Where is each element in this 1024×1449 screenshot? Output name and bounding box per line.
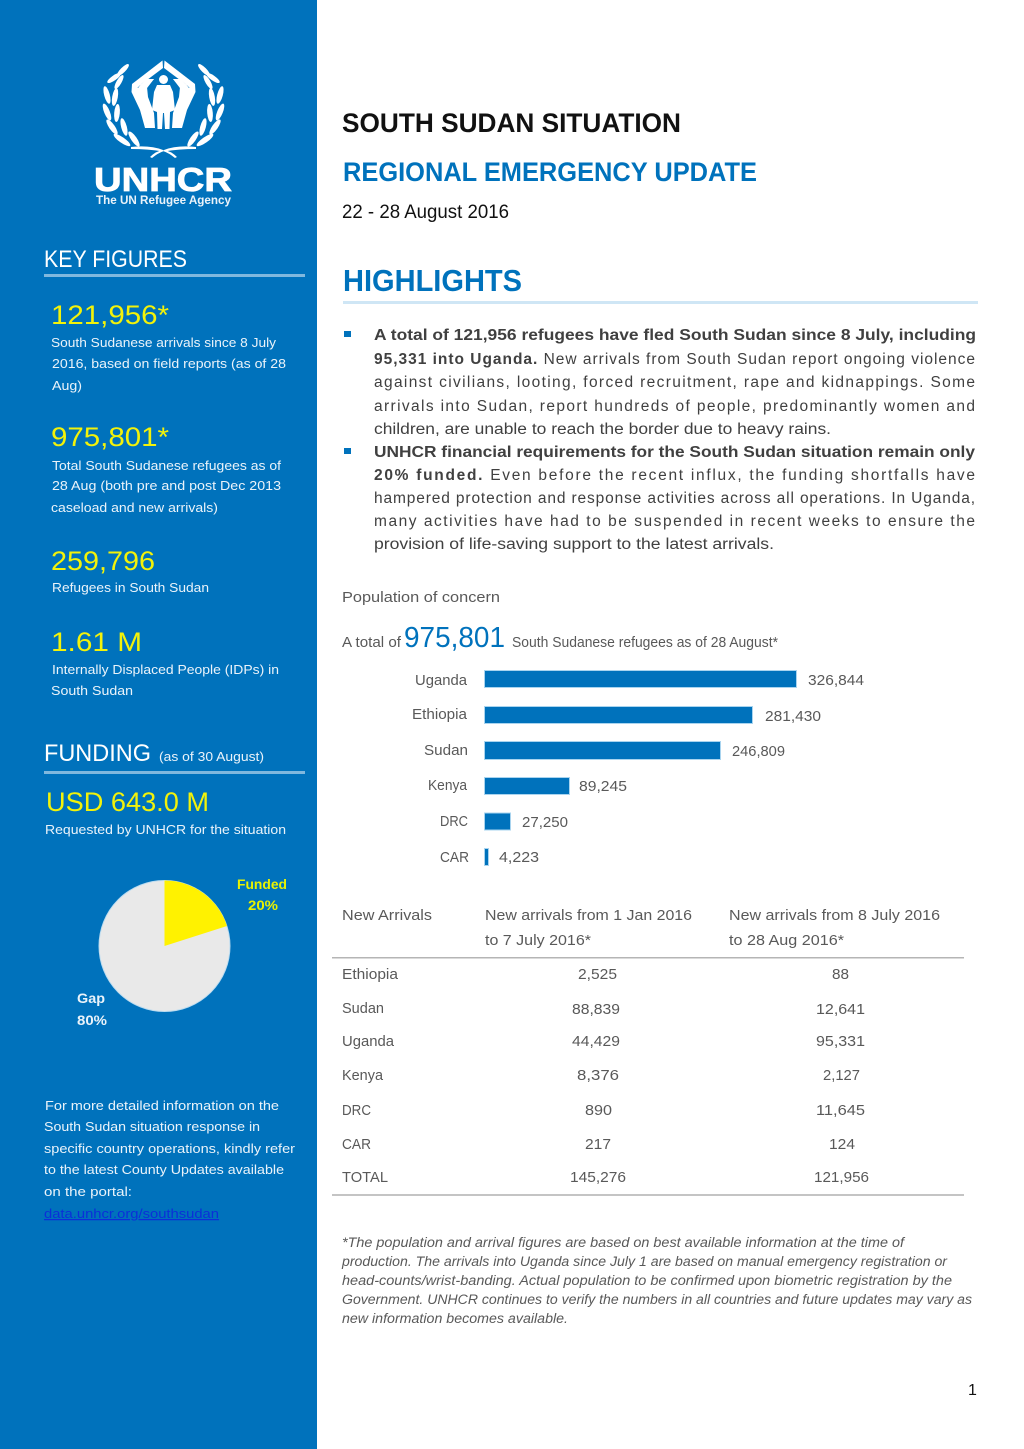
table: new arrivals: 124 bbox=[829, 1137, 855, 1153]
heading: funding: FUNDING bbox=[44, 740, 151, 767]
bar chart: refugees by country: Ethiopia bbox=[412, 707, 468, 723]
text block: highlights bullets: 95,331 into Uganda. New arrivals from South Sudan report ongoing violence bbox=[374, 351, 975, 368]
pie chart: funding: 20% bbox=[248, 898, 278, 913]
table: new arrivals: DRC bbox=[342, 1103, 371, 1119]
pie chart: funding: 80% bbox=[77, 1013, 107, 1028]
table: new arrivals: New Arrivals bbox=[342, 908, 432, 924]
pie chart: funding bbox=[77, 877, 287, 1028]
text block: footnote: *The population and arrival figures are based on best available information at the time of bbox=[342, 1235, 905, 1250]
text block: requested amount: Requested by UNHCR for the situation bbox=[45, 823, 286, 837]
table: new arrivals: Ethiopia bbox=[342, 967, 399, 983]
panel: blue sidebar bbox=[0, 0, 317, 1449]
text block: footnote: new information becomes available. bbox=[342, 1311, 568, 1326]
table: new arrivals: 88 bbox=[832, 967, 849, 983]
table: new arrivals: 217 bbox=[585, 1137, 611, 1153]
text block: 259,796 bbox=[51, 546, 209, 595]
table: new arrivals: 8,376 bbox=[577, 1068, 619, 1084]
text block: highlights bullets: A total of 121,956 refugees have fled South Sudan since 8 July, including bbox=[374, 327, 976, 344]
title: SOUTH SUDAN SITUATION bbox=[342, 108, 681, 138]
table: new arrivals: New arrivals from 8 July 2016 bbox=[729, 908, 940, 924]
text block: footnote: Government. UNHCR continues to verify the numbers in all countries and future updates may vary as bbox=[342, 1292, 972, 1307]
text block: 1.61 M bbox=[51, 627, 279, 698]
text block: highlights bullets: children, are unable to reach the border due to heavy rains. bbox=[374, 421, 831, 438]
text block: 1.61 M: 1.61 M bbox=[51, 627, 142, 657]
text block: 975,801 refugees: 975,801* bbox=[51, 422, 170, 452]
text block: more information: to the latest County Updates available bbox=[44, 1163, 284, 1177]
text block: more information: on the portal: bbox=[44, 1185, 132, 1199]
text block: more information: data.unhcr.org/southsudan bbox=[44, 1207, 219, 1221]
table: new arrivals bbox=[332, 908, 964, 1196]
table: new arrivals: 11,645 bbox=[816, 1103, 865, 1119]
table: new arrivals: 95,331 bbox=[816, 1034, 865, 1050]
pie chart: funding: Gap bbox=[77, 991, 105, 1006]
table: new arrivals: Sudan bbox=[342, 1001, 384, 1017]
text block: 975,801 refugees: Total South Sudanese refugees as of bbox=[52, 459, 282, 473]
bar chart: refugees by country: Sudan bbox=[424, 743, 468, 759]
text block: more information: specific country operations, kindly refer bbox=[44, 1142, 295, 1156]
subtitle: REGIONAL EMERGENCY UPDATE bbox=[343, 157, 757, 187]
heading: funding bbox=[44, 740, 305, 774]
text block: requested amount bbox=[45, 787, 286, 837]
text block: highlights bullets: provision of life-saving support to the latest arrivals. bbox=[374, 536, 774, 553]
bar chart: refugees by country: 89,245 bbox=[579, 779, 627, 795]
text block: footnote: head-counts/wrist-banding. Actual population to be confirmed upon biometric registration by the bbox=[342, 1273, 952, 1288]
text block: 975,801 refugees bbox=[51, 422, 282, 515]
text block: 121,956 arrivals: 2016, based on field reports (as of 28 bbox=[52, 357, 286, 371]
bar chart: refugees by country: Uganda bbox=[415, 673, 468, 689]
text block: 121,956 arrivals: Aug) bbox=[52, 379, 82, 393]
text block: 259,796: Refugees in South Sudan bbox=[52, 581, 209, 595]
text block: more information bbox=[44, 1099, 295, 1221]
icon: refugee figure bbox=[152, 75, 175, 129]
table: new arrivals: 890 bbox=[585, 1103, 612, 1119]
text block: footnote bbox=[341, 1235, 972, 1326]
text block: 1.61 M: Internally Displaced People (IDPs) in bbox=[52, 663, 279, 677]
heading: funding: (as of 30 August) bbox=[159, 749, 264, 764]
text block: highlights bullets: against civilians, looting, forced recruitment, rape and kidnappings. Some bbox=[374, 374, 975, 391]
text block: total refugees: 975,801 bbox=[404, 622, 505, 654]
text block: more information: South Sudan situation response in bbox=[44, 1120, 260, 1134]
table: new arrivals: 145,276 bbox=[570, 1170, 626, 1186]
text block: footnote: production. The arrivals into Uganda since July 1 are based on manual emergency registration or bbox=[341, 1254, 948, 1269]
text block: 1.61 M: South Sudan bbox=[51, 684, 133, 698]
text block: total refugees: South Sudanese refugees as of 28 August* bbox=[512, 635, 778, 651]
text block: 121,956 arrivals: South Sudanese arrivals since 8 July bbox=[51, 336, 277, 350]
bar chart: refugees by country: 326,844 bbox=[808, 673, 864, 689]
table: new arrivals: New arrivals from 1 Jan 2016 bbox=[485, 908, 692, 924]
table: new arrivals: to 28 Aug 2016* bbox=[729, 933, 844, 949]
table: new arrivals: CAR bbox=[342, 1137, 371, 1153]
text block: total refugees: A total of bbox=[342, 635, 402, 651]
text block: 975,801 refugees: 28 Aug (both pre and post Dec 2013 bbox=[52, 479, 281, 493]
bar chart: refugees by country bbox=[412, 670, 864, 866]
text block: 121,956 arrivals bbox=[51, 300, 286, 393]
icon: UNHCR logo: UNHCR bbox=[94, 161, 232, 198]
table: new arrivals: 88,839 bbox=[572, 1002, 620, 1018]
heading: highlights bbox=[343, 263, 978, 304]
table: new arrivals: Uganda bbox=[342, 1034, 395, 1050]
bar chart: refugees by country: 27,250 bbox=[522, 815, 568, 831]
bar chart: refugees by country: 4,223 bbox=[499, 850, 539, 866]
table: new arrivals: 12,641 bbox=[816, 1002, 865, 1018]
text block: 975,801 refugees: caseload and new arrivals) bbox=[51, 501, 218, 515]
text block: highlights bullets: 20% funded. Even before the recent influx, the funding shortfalls have bbox=[374, 467, 975, 484]
bar chart: refugees by country: DRC bbox=[440, 814, 468, 830]
icon: UNHCR logo bbox=[94, 60, 232, 207]
date: 22 - 28 August 2016 bbox=[342, 202, 509, 223]
text block: highlights bullets: UNHCR financial requirements for the South Sudan situation remain only bbox=[374, 444, 975, 461]
table: new arrivals: 2,127 bbox=[823, 1068, 860, 1084]
page number: 1 bbox=[968, 1382, 977, 1399]
text block: highlights bullets: many activities have had to be suspended in recent weeks to ensure the bbox=[374, 513, 975, 530]
text block: highlights bullets bbox=[344, 327, 976, 553]
text block: requested amount: USD 643.0 M bbox=[46, 787, 209, 817]
table: new arrivals: TOTAL bbox=[342, 1170, 388, 1186]
table: new arrivals: 44,429 bbox=[572, 1034, 620, 1050]
heading: population of concern: Population of concern bbox=[342, 590, 500, 606]
bar chart: refugees by country: Kenya bbox=[428, 778, 468, 794]
table: new arrivals: to 7 July 2016* bbox=[485, 933, 591, 949]
bar chart: refugees by country: 246,809 bbox=[732, 744, 785, 760]
text block: highlights bullets: arrivals into Sudan, report hundreds of people, predominantly women and bbox=[374, 398, 975, 415]
text block: 121,956 arrivals: 121,956* bbox=[51, 300, 170, 330]
bar chart: refugees by country: 281,430 bbox=[765, 709, 821, 725]
table: new arrivals: 2,525 bbox=[578, 967, 617, 983]
table: new arrivals: 121,956 bbox=[814, 1170, 869, 1186]
text block: 259,796: 259,796 bbox=[51, 546, 155, 576]
bar chart: refugees by country: CAR bbox=[440, 850, 469, 866]
text block: more information: For more detailed information on the bbox=[45, 1099, 279, 1113]
heading: key figures bbox=[44, 246, 305, 277]
text block: highlights bullets: hampered protection and response activities across all operations. In Uganda, bbox=[374, 490, 975, 507]
icon: UNHCR logo: The UN Refugee Agency bbox=[96, 195, 232, 207]
pie chart: funding: Funded bbox=[237, 877, 287, 892]
table: new arrivals: Kenya bbox=[342, 1068, 384, 1084]
heading: key figures: KEY FIGURES bbox=[44, 246, 187, 273]
heading: highlights: HIGHLIGHTS bbox=[343, 263, 522, 298]
text block: total refugees bbox=[342, 622, 778, 654]
